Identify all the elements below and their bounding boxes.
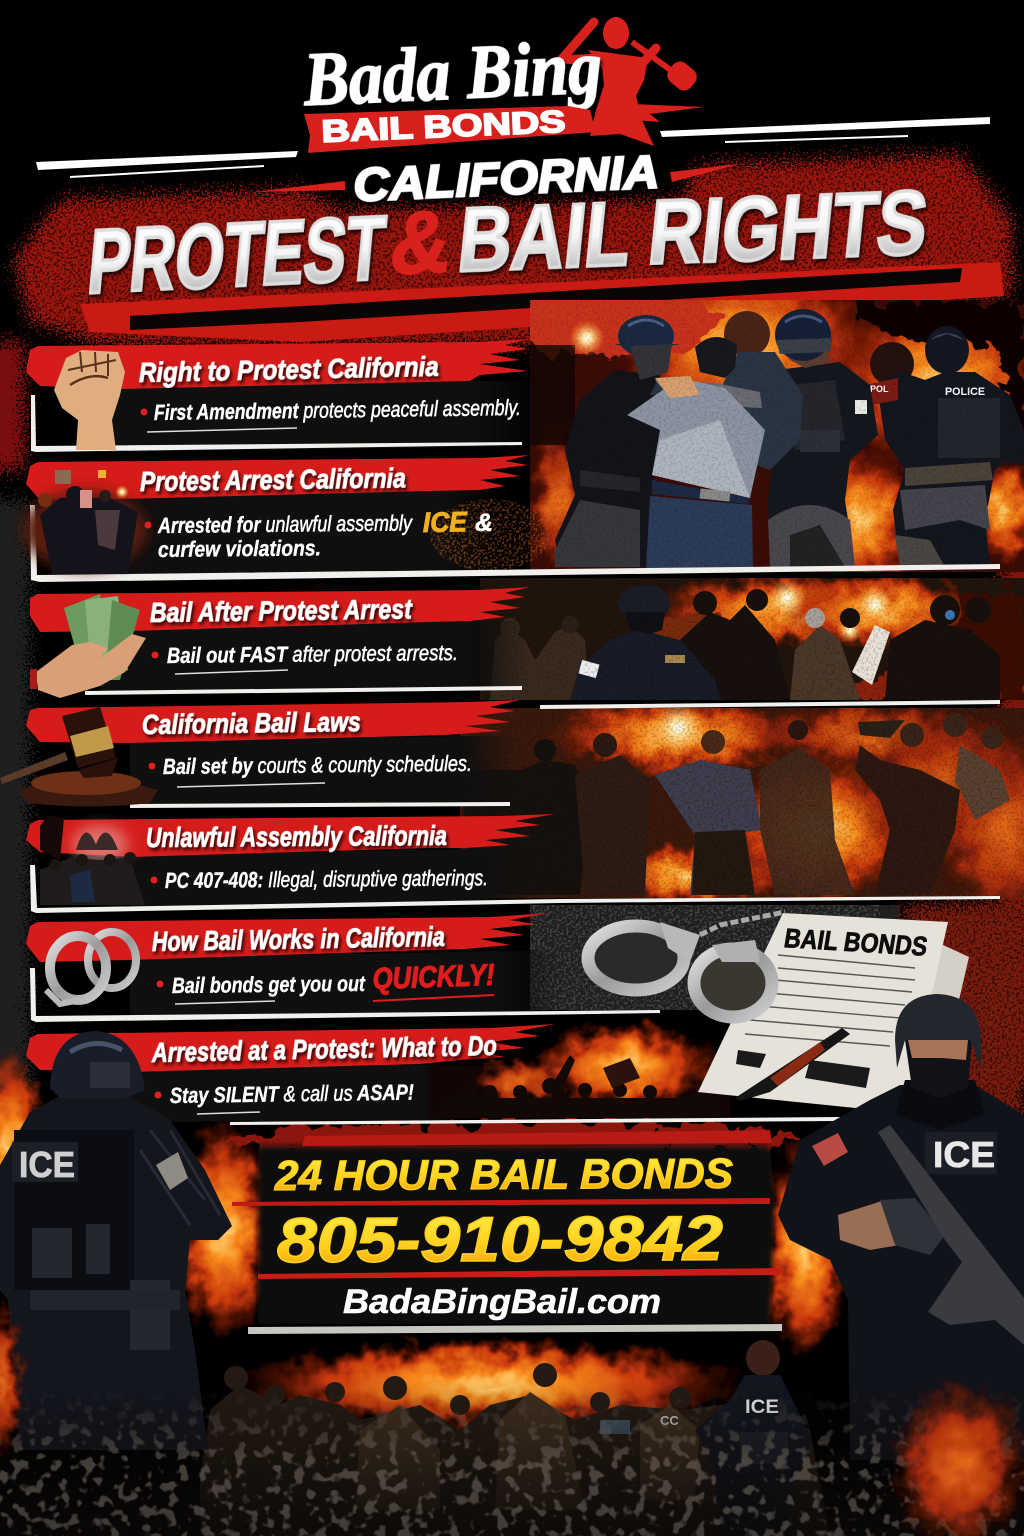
helmet bbox=[895, 994, 981, 1068]
image: crowd at night bbox=[40, 815, 145, 905]
ICE highlight: ICE bbox=[423, 506, 468, 538]
silhouettes and flag bbox=[484, 1055, 680, 1118]
banner bbox=[26, 339, 530, 389]
crowd silhouettes bbox=[200, 1363, 830, 1536]
document lines bbox=[745, 955, 915, 1046]
body text: Stay SILENT & call us ASAP! bbox=[170, 1080, 414, 1108]
arrested man head bbox=[695, 337, 737, 378]
cop right back bbox=[865, 326, 1024, 567]
banner bbox=[30, 587, 530, 632]
headline: 24 HOUR BAIL BONDS bbox=[274, 1150, 733, 1199]
scene grain bbox=[530, 300, 1024, 572]
document bbox=[698, 913, 948, 1113]
cop center bbox=[724, 309, 878, 567]
row 3 scene: crowd with officers bbox=[480, 572, 1024, 706]
agent right bbox=[778, 994, 1024, 1460]
document heading: BAIL BONDS bbox=[782, 922, 930, 962]
document black boxes bbox=[736, 1050, 870, 1088]
icon: gavel bbox=[0, 707, 158, 806]
QUICKLY underline bbox=[373, 995, 494, 1001]
scene dark patches bbox=[850, 300, 1024, 470]
row 6: how bail works bbox=[26, 913, 550, 1004]
row panels bbox=[100, 380, 560, 1122]
row 4: bail laws bbox=[0, 700, 520, 806]
back paper bbox=[880, 925, 969, 1060]
heading: California Bail Laws bbox=[142, 706, 361, 740]
bottom right embers bbox=[0, 1300, 1024, 1536]
icon: raised fist bbox=[54, 350, 125, 450]
helmet bbox=[50, 1031, 145, 1098]
logo script: Bada Bing bbox=[301, 25, 603, 122]
vest bbox=[14, 1130, 134, 1290]
body text: Bail out FAST after protest arrests. bbox=[167, 640, 458, 668]
logo banner bbox=[304, 106, 596, 153]
officer with ICE vest bbox=[695, 1340, 812, 1536]
sleeve folds bbox=[140, 1130, 220, 1225]
forearm bbox=[838, 1200, 900, 1250]
row 4 scene: riot bbox=[460, 708, 1024, 898]
crowd scene fire bbox=[652, 578, 1024, 700]
row 2: protest arrest bbox=[23, 455, 530, 574]
call to action panel bbox=[232, 1130, 782, 1334]
QUICKLY highlight: QUICKLY! bbox=[372, 959, 495, 996]
bullet bbox=[140, 408, 148, 416]
balaclava bbox=[905, 1040, 972, 1098]
white strokes bbox=[36, 117, 990, 178]
red band under title bbox=[80, 262, 1004, 342]
row 5: unlawful assembly bbox=[26, 814, 555, 905]
bottom grunge overlay bbox=[0, 1380, 1024, 1536]
banner bbox=[26, 1024, 555, 1072]
logo bail bonds text: BAIL BONDS bbox=[321, 104, 566, 149]
neck wrap bbox=[895, 1080, 985, 1130]
side grunge texture bbox=[0, 340, 1024, 1120]
cop left bbox=[555, 315, 680, 567]
riot grain bbox=[460, 708, 1024, 898]
bullet bbox=[154, 1092, 162, 1098]
row 6 scene: gray backdrop bbox=[530, 900, 1024, 1140]
underline bbox=[175, 670, 288, 674]
body text: First Amendment protects peaceful assembly. bbox=[154, 395, 521, 425]
arrested man shirt bbox=[627, 378, 765, 498]
riot crowd figures bbox=[460, 713, 1010, 895]
frames bbox=[30, 395, 1000, 1125]
underline bbox=[177, 783, 325, 787]
pen bbox=[735, 1028, 850, 1101]
row 3: bail after arrest bbox=[30, 587, 530, 698]
title grunge red backdrop bbox=[0, 150, 1024, 350]
handcuffs bbox=[588, 912, 785, 1017]
red divider one bbox=[232, 1198, 770, 1206]
banner bbox=[26, 700, 520, 743]
heading: Arrested at a Protest: What to Do bbox=[151, 1030, 497, 1068]
body line two: curfew violations. bbox=[158, 535, 321, 562]
gear detail bbox=[600, 1420, 630, 1434]
body text: Bail bonds get you out bbox=[172, 971, 366, 998]
title: California: CALIFORNIA bbox=[352, 145, 660, 211]
phone number: 805-910-9842 bbox=[277, 1204, 723, 1276]
officer in crowd bbox=[570, 630, 720, 700]
icon: handcuffs bbox=[46, 932, 136, 1004]
title bbox=[84, 145, 932, 313]
underline bbox=[147, 428, 297, 432]
body text: PC 407-408: Illegal, disruptive gatherings. bbox=[165, 865, 488, 893]
row 7: what to do bbox=[26, 1024, 555, 1114]
cop right back: POL bbox=[870, 384, 889, 394]
bullet bbox=[150, 876, 158, 884]
title: Bail Rights: BAIL RIGHTS bbox=[454, 172, 932, 291]
crowd grain bbox=[480, 578, 1024, 700]
bullet bbox=[156, 980, 164, 988]
bullet bbox=[152, 652, 158, 658]
riot scene fire bbox=[544, 708, 1024, 898]
title: Protest: PROTEST bbox=[84, 197, 389, 313]
bullet bbox=[144, 522, 152, 528]
website: BadaBingBail.com bbox=[343, 1283, 661, 1321]
heading: How Bail Works in California bbox=[152, 921, 445, 957]
lower fire field bbox=[0, 1050, 850, 1431]
arrested man jeans bbox=[646, 496, 753, 568]
ampersand: & bbox=[475, 509, 493, 537]
body text: Bail set by courts & county schedules. bbox=[163, 751, 472, 779]
body bbox=[0, 1096, 232, 1450]
pouches bbox=[32, 1224, 170, 1350]
flag patch bbox=[812, 1133, 848, 1166]
officer with ICE vest: ICE bbox=[745, 1397, 779, 1418]
ICE text: ICE bbox=[933, 1134, 995, 1175]
agent left bbox=[0, 1031, 232, 1450]
banner bbox=[26, 814, 555, 857]
banner bbox=[26, 455, 530, 500]
scene fire bbox=[530, 300, 1024, 572]
red divider two bbox=[258, 1268, 780, 1279]
flag patch bbox=[156, 1152, 188, 1190]
title: ampersand: & bbox=[386, 191, 456, 293]
body text: Arrested for unlawful assembly bbox=[157, 510, 414, 538]
banner bbox=[26, 913, 550, 962]
underlines bbox=[175, 1001, 275, 1004]
bottom crowd: CC bbox=[660, 1413, 679, 1428]
belt bbox=[30, 1290, 180, 1310]
white rule bbox=[248, 1324, 782, 1334]
blue jacket officer bbox=[650, 352, 803, 470]
underline bbox=[197, 1112, 260, 1114]
heading: Right to Protest California bbox=[138, 351, 439, 388]
panel bbox=[258, 1146, 775, 1324]
heading: Bail After Protest Arrest bbox=[150, 593, 413, 628]
bottom crowd bbox=[200, 1340, 830, 1536]
icon: woman with sledgehammer bbox=[561, 17, 704, 146]
top red stroke bbox=[302, 1130, 772, 1146]
bail bond document and cuffs bbox=[588, 912, 969, 1113]
body bbox=[778, 1085, 1024, 1460]
cop right back: POLICE bbox=[945, 386, 985, 398]
bullet bbox=[148, 762, 156, 770]
ICE text: ICE bbox=[19, 1144, 75, 1185]
eyes bbox=[908, 1040, 968, 1060]
heading: Protest Arrest California bbox=[140, 462, 406, 497]
crowd figures bbox=[355, 1392, 700, 1510]
row 2 speckled fire bbox=[430, 499, 550, 571]
street light bbox=[569, 320, 605, 356]
glove bbox=[880, 1198, 945, 1255]
paper bbox=[852, 625, 890, 685]
small scene fire bbox=[470, 1021, 715, 1109]
ICE patch bbox=[12, 1142, 78, 1182]
logo: Bada Bing Bail Bonds bbox=[301, 17, 704, 153]
row 7 scene: burning protest bbox=[430, 1021, 730, 1120]
ICE patch bbox=[925, 1132, 997, 1174]
image: small crowd with torches bbox=[23, 470, 147, 574]
row 1: right to protest bbox=[26, 339, 530, 450]
icon: hand with cash bbox=[30, 594, 146, 698]
title red accents bbox=[255, 164, 740, 192]
arm bbox=[655, 380, 762, 408]
heading: Unlawful Assembly California bbox=[146, 820, 447, 853]
crowd silhouettes bbox=[490, 589, 1000, 700]
scene: police arrest bbox=[530, 300, 1024, 572]
rifle bbox=[878, 1125, 1024, 1345]
